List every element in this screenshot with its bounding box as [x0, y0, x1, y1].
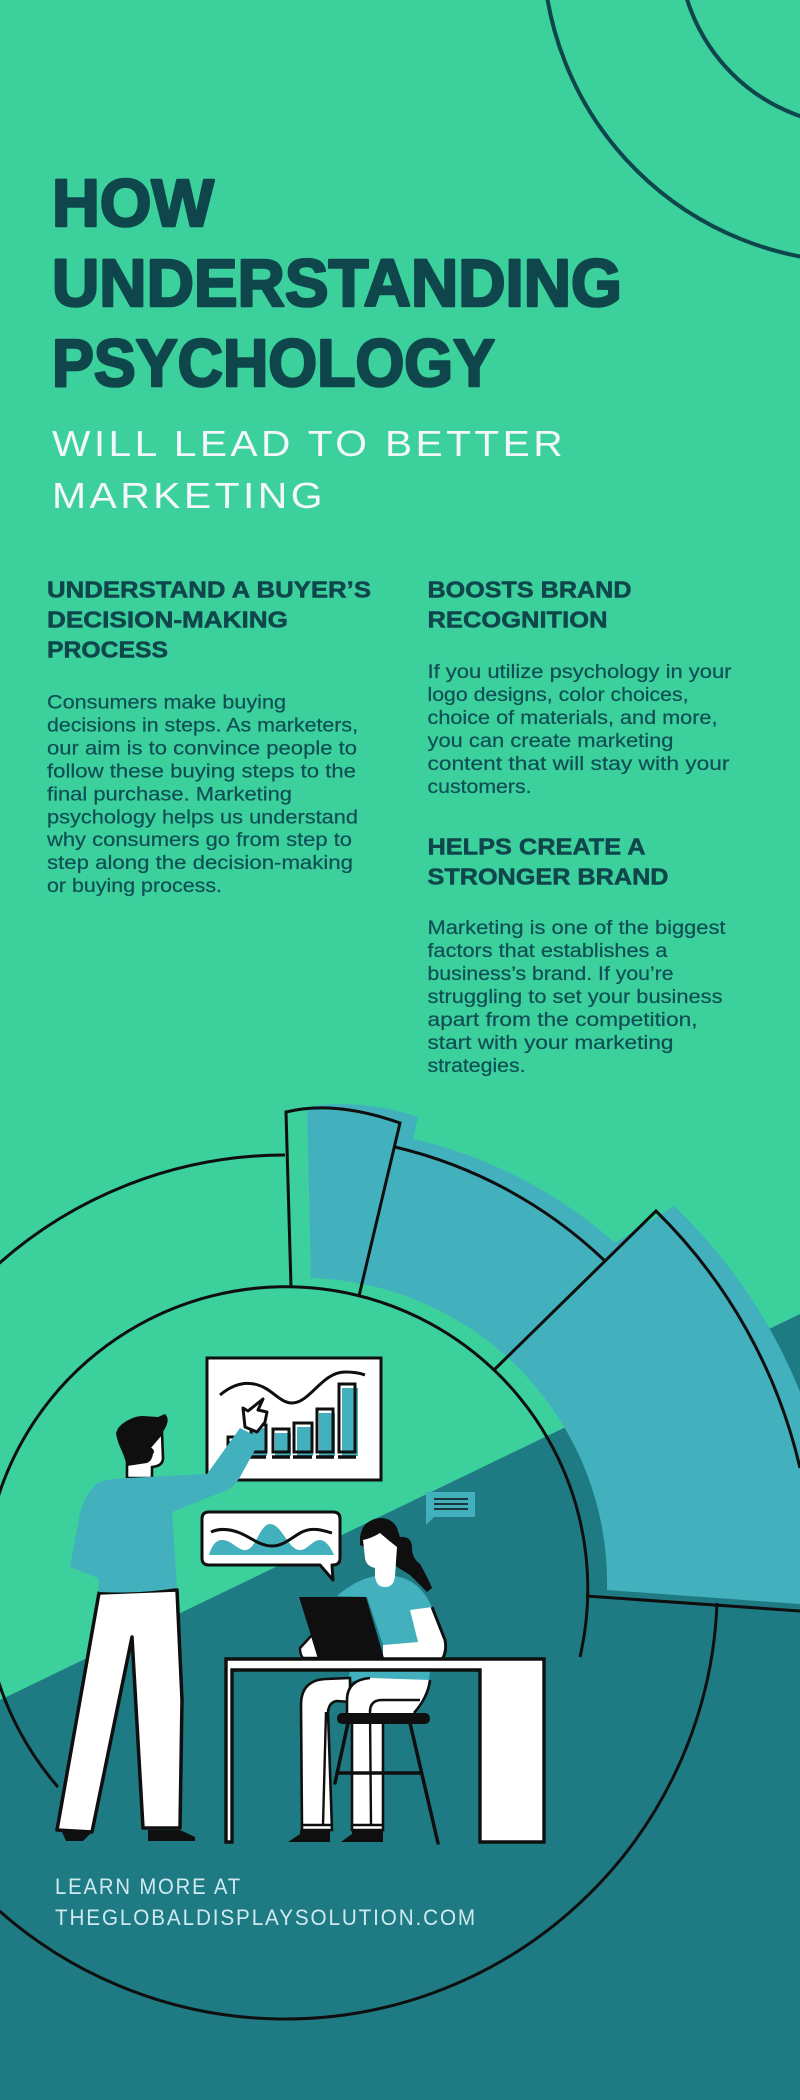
- title: PSYCHOLOGY: [52, 326, 495, 401]
- woman: hair: [360, 1518, 432, 1592]
- footer call to action: [55, 1874, 477, 1930]
- speech bubble with wave chart: [202, 1512, 340, 1580]
- man: pants: [57, 1590, 182, 1832]
- body text: buyer's process: Consumers make buying: [47, 692, 286, 713]
- body text: brand recognition: logo designs, color choices,: [428, 685, 688, 706]
- outline circles and wedges: [0, 1108, 800, 2019]
- heading: helps create a stronger brand: [428, 834, 668, 890]
- body text: buyer's process: follow these buying steps to the: [47, 761, 356, 782]
- body text: stronger brand: struggling to set your business: [428, 987, 722, 1008]
- body text: buyer's process: final purchase. Marketing: [47, 784, 292, 805]
- body text: buyer's process: [46, 692, 358, 897]
- heading: boosts brand recognition: RECOGNITION: [428, 606, 608, 632]
- body text: buyer's process: why consumers go from step to: [46, 830, 352, 851]
- decorative arcs top right: [543, 0, 800, 262]
- subtitle: MARKETING: [52, 475, 326, 516]
- woman: front thigh: [347, 1678, 430, 1713]
- man: sweater: [70, 1428, 258, 1592]
- body text: buyer's process: or buying process.: [47, 876, 222, 897]
- heading: boosts brand recognition: [428, 576, 632, 632]
- body text: stronger brand: start with your marketing: [428, 1033, 674, 1054]
- stool: [335, 1713, 438, 1843]
- desk: [226, 1659, 544, 1842]
- footer call to action: THEGLOBALDISPLAYSOLUTION.COM: [55, 1905, 477, 1930]
- body text: brand recognition: If you utilize psychology in your: [428, 662, 732, 683]
- woman: shoes: [288, 1830, 383, 1842]
- body text: stronger brand: apart from the competition,: [428, 1010, 698, 1031]
- body text: brand recognition: customers.: [428, 777, 532, 798]
- woman: [288, 1518, 446, 1843]
- man: [57, 1399, 267, 1841]
- woman: front shin: [352, 1713, 383, 1830]
- woman: shirt hem: [348, 1670, 430, 1681]
- body text: brand recognition: choice of materials, and more,: [428, 708, 718, 729]
- woman: face and neck: [363, 1533, 397, 1587]
- subtitle: [52, 423, 566, 516]
- body text: stronger brand: Marketing is one of the biggest: [428, 918, 726, 939]
- footer call to action: LEARN MORE AT: [55, 1874, 242, 1899]
- body text: brand recognition: content that will stay with your: [428, 754, 730, 775]
- icon: message bubble: [426, 1492, 475, 1525]
- chart board: [207, 1358, 381, 1480]
- chart line: [220, 1372, 365, 1403]
- body text: stronger brand: strategies.: [428, 1056, 526, 1077]
- bar chart: [228, 1384, 358, 1457]
- title: HOW: [52, 166, 215, 241]
- heading: understand a buyer's decision-making process: DECISION-MAKING: [47, 606, 288, 632]
- body text: buyer's process: decisions in steps. As marketers,: [47, 715, 358, 736]
- man: hand: [243, 1399, 267, 1432]
- woman: arm: [383, 1607, 446, 1658]
- blue offset wedge shape: [307, 1104, 800, 1604]
- body text: buyer's process: psychology helps us understand: [47, 807, 358, 828]
- man: hair: [116, 1414, 168, 1466]
- man: neck and face: [127, 1433, 163, 1478]
- heading: understand a buyer's decision-making process: UNDERSTAND A BUYER’S: [47, 576, 371, 602]
- laptop: [299, 1597, 384, 1658]
- woman: left hand: [300, 1635, 319, 1658]
- heading: understand a buyer's decision-making process: [47, 576, 371, 662]
- body text: buyer's process: our aim is to convince people to: [47, 738, 357, 759]
- heading: helps create a stronger brand: HELPS CREATE A: [428, 834, 646, 860]
- dark teal background band: [0, 1314, 800, 2100]
- body text: stronger brand: business’s brand. If you’re: [428, 964, 674, 985]
- heading: helps create a stronger brand: STRONGER BRAND: [428, 864, 668, 890]
- body text: brand recognition: [428, 662, 732, 798]
- man: shoes: [62, 1830, 195, 1841]
- woman: back leg: [301, 1678, 350, 1830]
- subtitle: WILL LEAD TO BETTER: [52, 423, 566, 464]
- title: UNDERSTANDING: [52, 246, 622, 321]
- heading: understand a buyer's decision-making process: PROCESS: [47, 636, 168, 662]
- woman: shirt: [337, 1576, 432, 1645]
- body text: brand recognition: you can create marketing: [428, 731, 674, 752]
- heading: boosts brand recognition: BOOSTS BRAND: [428, 576, 632, 602]
- body text: stronger brand: [428, 918, 726, 1077]
- body text: stronger brand: factors that establishes a: [428, 941, 668, 962]
- body text: buyer's process: step along the decision-making: [47, 853, 353, 874]
- title: [52, 166, 622, 401]
